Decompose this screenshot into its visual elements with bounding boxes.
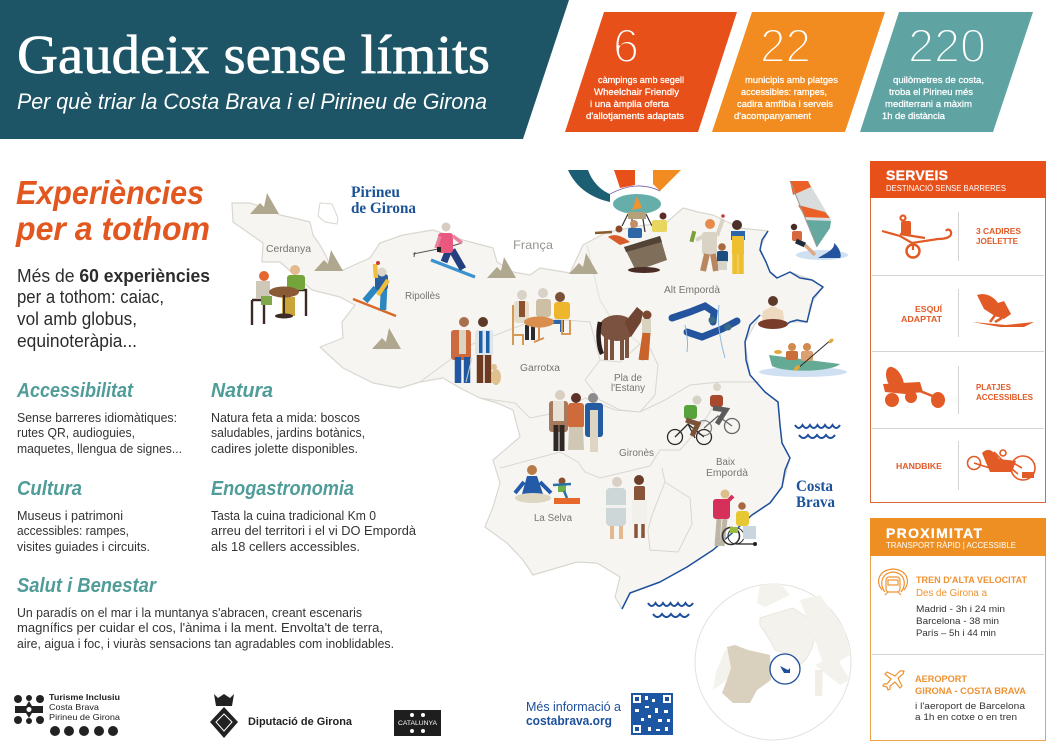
illustration: blind walkers with guide dog [451,317,501,385]
block: Enogastronomia: Tasta la cuina tradicional Km 0 [211,509,376,523]
illustration: meditating woman [758,296,788,329]
panel: Serveis [870,161,1046,502]
stat card: 220 km: 1h de distància [882,111,945,121]
stat card: 220 km: troba el Pirineu més [889,87,974,97]
map labels: Ripollès [405,291,440,302]
text: airport: i l'aeroport de Barcelona [915,701,1025,711]
map labels: Garrotxa [520,363,560,374]
logo: Turisme Inclusiu [14,692,120,736]
block: Enogastronomia: arreu del territori i el vi DO Empordà [211,524,416,538]
text: high-speed train: TREN D'ALTA VELOCITAT [916,575,1027,585]
stat card: 22 municipalities: d'acompanyament [734,111,812,121]
panel: Serveis: DESTINACIÓ SENSE BARRERES [886,184,1006,193]
illustration: three visitors [549,390,603,452]
logo: Turisme Inclusiu: Pirineu de Girona [49,712,120,722]
header banner [0,0,569,139]
block: Cultura: accessibles: rampes, [17,524,129,538]
panel: Serveis: SERVEIS [886,167,948,183]
left heading [15,174,210,247]
service: adaptive ski: ESQUÍ [915,304,943,314]
logo: Catalunya [394,710,441,736]
service: joelette chair: JOËLETTE [976,236,1019,246]
service: handbike [896,450,1035,480]
label: Pirineu de Girona [351,184,416,217]
stat card: 6 campsites: d'allotjaments adaptats [586,111,685,121]
stat card: 220 km: mediterrani a màxim [885,99,972,109]
stat card: 22 municipalities: accessibles: rampes, [741,87,827,97]
illustration: spa couple [606,475,647,539]
service: joelette chair: 3 CADIRES [976,227,1022,236]
logo: Diputació de Girona: Diputació de Girona [248,716,353,728]
panel: Proximitat: PROXIMITAT [886,525,982,541]
map labels: l'Estany [611,383,645,394]
service: adaptive ski: ADAPTAT [901,315,942,324]
text: high-speed train [916,575,1027,638]
title: Gaudeix sense límits [17,24,490,85]
stat card: 220 km: quilòmetres de costa, [893,75,984,85]
intro text: vol amb globus, [17,309,137,329]
illustration: kayak [759,338,847,377]
map labels: Pla de [614,373,642,384]
block: Natura: Natura [211,380,273,402]
label: Costa Brava: Costa [796,478,833,495]
block: Accessibilitat: rutes QR, audioguies, [17,426,135,440]
illustration: cyclists [668,383,740,444]
map of Girona [232,203,823,609]
illustration: family with wine [690,214,745,274]
service: beach chair: ACCESSIBLES [976,393,1034,402]
text: airport: a 1h en cotxe o en tren [915,712,1017,722]
block: Salut i Benestar: Un paradís on el mar i la muntanya s'abracen, creant escenaris [17,606,362,620]
left heading: Experiències [16,174,204,211]
block: Natura: Natura feta a mida: boscos [211,411,360,425]
block: Natura: saludables, jardins botànics, [211,426,365,440]
label: Pirineu de Girona: Pirineu [351,184,400,201]
block: Cultura: Museus i patrimoni [17,509,123,523]
map labels: Baix [716,457,735,468]
more information [526,700,621,728]
icon: waves bottom [648,603,693,617]
block: Enogastronomia: als 18 cellers accessibles. [211,540,360,554]
illustration: yoga man and child [515,465,580,504]
block: Accessibilitat: Sense barreres idiomàtiques: [17,411,177,425]
block: Salut i Benestar: aire, aigua i foc, i viuràs sensacions tan agradables com inoblidables. [17,637,394,651]
label: Pirineu de Girona: de Girona [351,200,416,217]
label: Costa Brava: Brava [796,494,835,511]
block: Cultura: visites guiades i circuits. [17,540,150,554]
stat card: 6 campsites: càmpings amb segell [598,75,684,85]
block: Cultura: Cultura [17,478,82,500]
stat card: 22 municipalities: 22 [760,19,811,72]
block: Accessibilitat [16,380,182,456]
illustration: divers [672,305,737,358]
text: high-speed train: Des de Girona a [916,588,987,599]
block: Salut i Benestar: Salut i Benestar [17,575,157,597]
icon: mountains [250,193,598,349]
illustration: table in Cerdanya [252,265,306,325]
icon: waves right [795,425,840,438]
logo: Diputació de Girona [210,694,353,738]
intro text: per a tothom: caiac, [17,287,164,307]
intro text [17,266,210,351]
stat card: 6 campsites: 6 [613,19,639,72]
stat card: 6 campsites [565,12,737,132]
stat card: 22 municipalities: municipis amb platges [745,75,839,85]
illustration: windsurfer [790,181,848,260]
logo: Catalunya: CATALUNYA [398,721,437,727]
map labels: Alt Empordà [664,285,720,296]
illustration: horse with rider [599,307,652,360]
map labels: La Selva [534,513,572,524]
service: beach chair: PLATJES [976,383,1012,392]
service: beach chair [882,364,1034,408]
map labels: Cerdanya [266,244,311,255]
text: high-speed train: París – 5h i 44 min [916,628,996,638]
block: Natura [211,380,365,456]
logo: Turisme Inclusiu: Turisme Inclusiu [49,692,120,702]
QR code [631,693,673,735]
icon: train [879,569,907,595]
stat card: 6 campsites: Wheelchair Friendly [594,87,680,97]
block: Salut i Benestar: magnífics per cuidar el cos, l'ànima i la ment. Envolta't de terra, [17,621,383,635]
illustration: hot air balloon [568,170,681,273]
panel: Proximitat: TRANSPORT RÀPID | ACCESSIBLE [886,541,1016,550]
left heading: per a tothom [15,210,210,247]
illustration: snowboarder [353,261,396,316]
block: Salut i Benestar [17,575,394,651]
stat card: 22 municipalities [712,12,885,132]
locator globe [695,583,851,740]
subtitle: Per què triar la Costa Brava i el Pirineu de Girona [17,89,487,114]
text: high-speed train: Madrid - 3h i 24 min [916,604,1005,614]
intro text: Més de 60 experiències [17,266,210,286]
text: airport [915,674,1027,722]
stat card: 220 km [860,12,1033,132]
block: Natura: cadires jolette disponibles. [211,442,358,456]
service: handbike: HANDBIKE [896,462,943,471]
stat card: 22 municipalities: cadira amfíbia i serveis [737,99,834,109]
text: airport: GIRONA - COSTA BRAVA [915,686,1027,696]
more information: Més informació a [526,700,621,714]
map labels [266,238,748,524]
illustration: group at table [513,288,570,345]
logo: Turisme Inclusiu: Costa Brava [49,702,99,712]
block: Accessibilitat: maquetes, llengua de signes... [17,442,182,456]
panel: Proximitat [870,518,1046,740]
illustration: skier [413,222,475,277]
illustration: wheelchair users [713,490,757,546]
block: Enogastronomia [211,478,416,554]
intro text: equinoteràpia... [17,331,137,351]
map labels: Gironès [619,448,654,459]
label: Costa Brava [796,478,835,511]
service: joelette chair [882,216,1022,258]
stat card: 6 campsites: i una àmplia oferta [590,99,669,109]
stat card: 220 km: 220 [908,19,986,72]
text: airport: AEROPORT [915,674,967,684]
map labels: Empordà [706,468,748,479]
service: adaptive ski [901,294,1034,327]
text: high-speed train: Barcelona - 38 min [916,616,999,626]
icon: plane [883,671,904,690]
block: Enogastronomia: Enogastronomia [211,478,354,500]
coast line [622,231,823,609]
map labels: França [513,238,553,252]
more information: costabrava.org [526,714,612,728]
block: Accessibilitat: Accessibilitat [16,380,134,402]
block: Cultura [17,478,150,554]
